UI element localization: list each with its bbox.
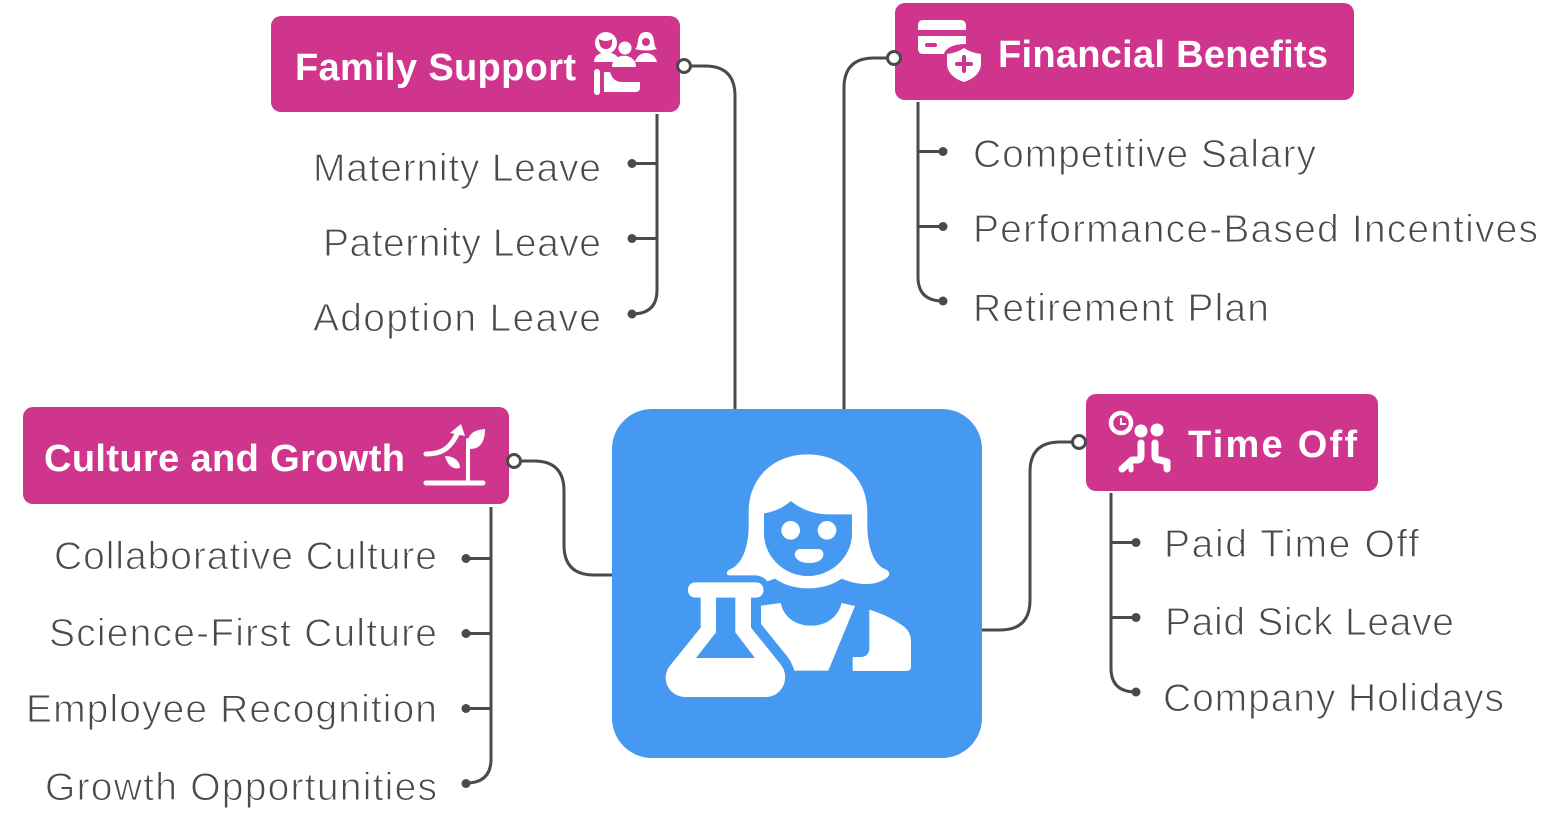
connector node: Financial Benefits (888, 52, 900, 64)
heading: Financial Benefits: Financial Benefits (998, 34, 1328, 76)
icon: scientist with flask (666, 454, 911, 697)
text: Collaborative Culture: Collaborative Culture (54, 535, 437, 578)
text: Adoption Leave: Adoption Leave (313, 297, 601, 340)
panel: Financial Benefits (895, 3, 1354, 100)
item bullets: Culture and Growth (462, 554, 470, 788)
connector node: Family Support (678, 60, 690, 72)
icon: card and shield (918, 20, 981, 82)
connector node: Culture and Growth (508, 454, 520, 468)
text: Performance-Based Incentives: Performance-Based Incentives (973, 208, 1538, 251)
connector: center to Family Support (691, 66, 735, 409)
text: Paid Sick Leave: Paid Sick Leave (1165, 601, 1454, 644)
connector: center to Culture and Growth (521, 461, 612, 575)
text: Maternity Leave: Maternity Leave (313, 147, 601, 190)
item bullets: Financial Benefits (938, 147, 948, 306)
text: Employee Recognition: Employee Recognition (26, 688, 437, 731)
connector: Time Off items (1111, 493, 1136, 692)
connector: Financial Benefits items (918, 102, 943, 301)
icon: growing plant (426, 424, 485, 483)
connector: Culture and Growth items (466, 507, 491, 783)
panel: Time Off (1086, 394, 1378, 491)
panel: center icon (612, 409, 982, 758)
heading: Culture and Growth: Culture and Growth (44, 438, 405, 480)
icon: family (594, 32, 657, 95)
text: Growth Opportunities: Growth Opportunities (45, 766, 437, 809)
connector: center to Financial Benefits (844, 58, 888, 409)
panel: Family Support (271, 16, 680, 112)
heading: Family Support: Family Support (295, 47, 576, 89)
icon: clock and people (1111, 413, 1167, 470)
heading: Time Off: Time Off (1188, 424, 1357, 466)
item bullets: Family Support (628, 159, 636, 318)
text: Retirement Plan: Retirement Plan (973, 287, 1269, 330)
text: Company Holidays: Company Holidays (1163, 677, 1504, 720)
connector: center to Time Off (982, 442, 1073, 630)
text: Competitive Salary: Competitive Salary (973, 133, 1316, 176)
item bullets: Time Off (1132, 538, 1140, 696)
connector: Family Support items (632, 114, 657, 314)
text: Paid Time Off: Paid Time Off (1164, 523, 1419, 566)
connector node: Time Off (1072, 436, 1086, 448)
panel: Culture and Growth (23, 407, 509, 504)
text: Paternity Leave: Paternity Leave (323, 222, 601, 265)
text: Science-First Culture: Science-First Culture (49, 612, 437, 655)
